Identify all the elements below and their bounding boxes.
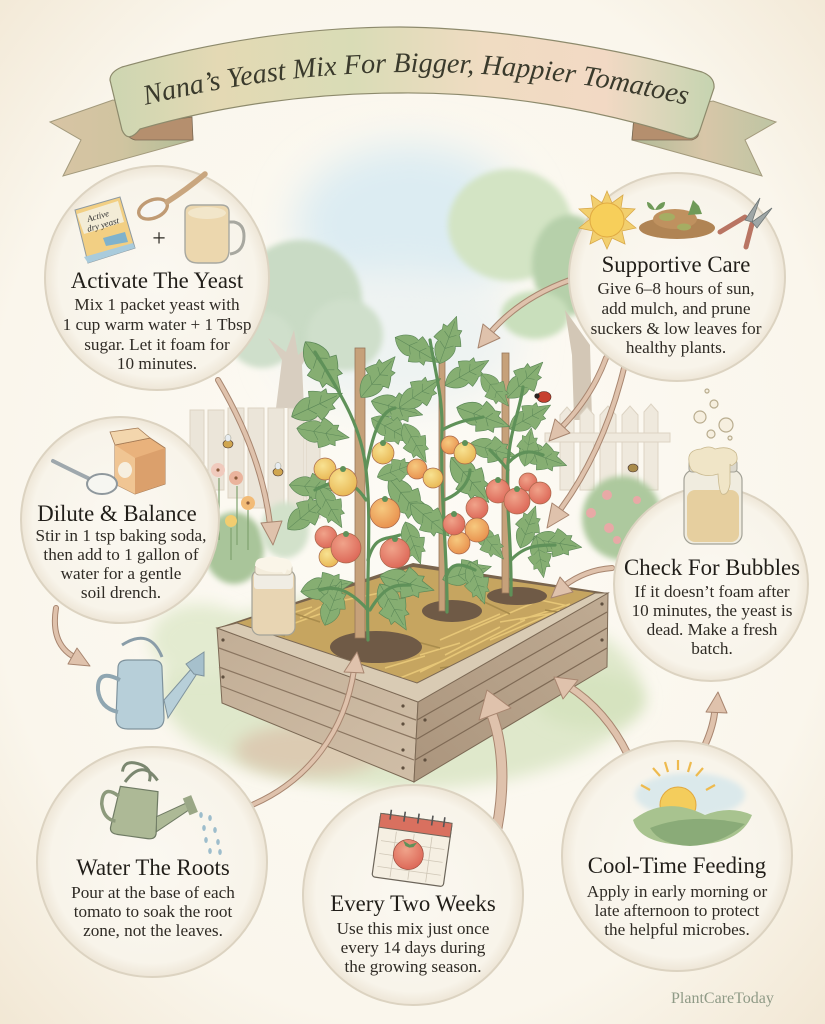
body text: every 14 days during <box>341 938 486 957</box>
heading: Water The Roots <box>76 855 230 880</box>
arrow: water to roots <box>252 652 364 805</box>
heading: Check For Bubbles <box>624 555 800 580</box>
plant stems <box>315 340 555 640</box>
ribbon folds <box>128 117 193 140</box>
body text: 1 cup warm water + 1 Tbsp <box>63 315 251 334</box>
title text: Nana’s Yeast Mix For Bigger, Happier Tomatoes <box>144 53 689 105</box>
banner ribbon <box>49 26 777 177</box>
panel: check for bubbles <box>614 389 808 681</box>
icon: spoon <box>136 174 205 223</box>
jar in bed <box>252 556 295 635</box>
arrow: yeast to jar <box>218 380 282 545</box>
arrow: care to low leaves <box>547 368 624 528</box>
raised wooden bed <box>217 563 608 782</box>
icon: mulch pile <box>639 200 715 239</box>
body text <box>632 582 793 658</box>
icon: water drops <box>199 812 222 855</box>
heading: Every Two Weeks <box>330 891 496 916</box>
icon: baking soda box <box>110 428 165 494</box>
icon: sunrise over hills <box>633 760 752 846</box>
body text <box>337 919 490 976</box>
body text: 10 minutes. <box>117 354 197 373</box>
icon: yeast packet: dry yeast <box>86 215 121 234</box>
body text: the growing season. <box>344 957 482 976</box>
body text: soil drench. <box>81 583 161 602</box>
body text: healthy plants. <box>626 338 726 357</box>
icon: bubbles <box>694 389 733 440</box>
body text: tomato to soak the root <box>74 902 232 921</box>
body text: zone, not the leaves. <box>83 921 223 940</box>
front-left wall <box>217 628 418 782</box>
heading: Supportive Care <box>602 252 750 277</box>
body text <box>71 883 235 940</box>
heading: Cool-Time Feeding <box>588 853 766 878</box>
arrow: every two weeks to bed <box>479 690 511 828</box>
body text: then add to 1 gallon of <box>43 545 199 564</box>
body text <box>36 526 206 602</box>
grass and soil ground <box>150 590 645 790</box>
icon: green watering can <box>98 759 203 845</box>
ribbon face <box>110 27 714 138</box>
body text: dead. Make a fresh <box>647 620 778 639</box>
arrow: cool-time to bed <box>554 677 628 755</box>
body text: Give 6–8 hours of sun, <box>597 279 755 298</box>
bee right <box>273 462 283 476</box>
icon: calendar with tomato <box>372 808 453 887</box>
plant 1 leaves <box>278 332 438 638</box>
right ribbon tail <box>632 101 776 176</box>
icon: yeast packet <box>75 197 135 263</box>
watermark: PlantCareToday <box>671 990 774 1007</box>
body text: late afternoon to protect <box>595 901 760 920</box>
body text <box>587 882 767 939</box>
icon: bubbling jar <box>684 447 742 544</box>
body text: Use this mix just once <box>337 919 490 938</box>
plant 3 leaves <box>466 352 584 580</box>
arrow: care to plants <box>478 280 570 348</box>
tomato plant stakes <box>355 348 509 638</box>
body text: water for a gentle <box>61 564 182 583</box>
icon: blue watering can <box>98 638 204 729</box>
arrow: cool-time to check bubbles <box>705 692 727 745</box>
left ribbon tail <box>50 100 193 176</box>
body text <box>63 295 251 373</box>
rose bush right <box>582 476 662 560</box>
panel: water the roots <box>37 747 267 977</box>
body text: 10 minutes, the yeast is <box>632 601 793 620</box>
body text <box>591 279 762 357</box>
body text: Stir in 1 tsp baking soda, <box>36 526 206 545</box>
panel: cool-time feeding <box>562 741 792 971</box>
icon: sun <box>579 191 636 249</box>
body text: batch. <box>691 639 733 658</box>
fence left <box>190 408 320 518</box>
body text: sugar. Let it foam for <box>84 335 230 354</box>
arrow: care to leaves <box>549 358 606 441</box>
garden scene backdrop <box>230 145 608 420</box>
panel: every two weeks <box>303 785 523 1005</box>
plant 2 leaves <box>388 311 515 608</box>
body text: Apply in early morning or <box>587 882 767 901</box>
icon: plus: + <box>152 226 166 252</box>
body text: If it doesn’t foam after <box>634 582 790 601</box>
body text: add mulch, and prune <box>602 299 751 318</box>
heading: Dilute & Balance <box>37 501 197 526</box>
icon: mug <box>185 205 244 263</box>
front-right wall <box>414 593 608 782</box>
icon: yeast packet: Active <box>85 208 110 224</box>
body text: Mix 1 packet yeast with <box>74 295 240 314</box>
panel: activate the yeast <box>45 166 269 390</box>
top rim <box>217 593 608 702</box>
body text: Pour at the base of each <box>71 883 235 902</box>
icon: measuring spoon <box>53 461 117 494</box>
heading: Activate The Yeast <box>71 268 244 293</box>
bee left <box>223 434 233 448</box>
body text: suckers & low leaves for <box>591 319 762 338</box>
panel: supportive care <box>569 173 785 381</box>
body text: the helpful microbes. <box>604 920 750 939</box>
panel: dilute and balance <box>21 417 219 623</box>
bee far right <box>628 464 638 472</box>
icon: pruners <box>720 198 772 247</box>
flower bed left <box>204 463 309 584</box>
arrow: dilute to watering can <box>55 608 90 666</box>
fence right <box>545 404 670 490</box>
straw mulch <box>255 591 578 678</box>
ladybug <box>534 392 551 402</box>
tomatoes <box>314 436 551 568</box>
arrow: check bubbles to bed <box>551 568 612 598</box>
